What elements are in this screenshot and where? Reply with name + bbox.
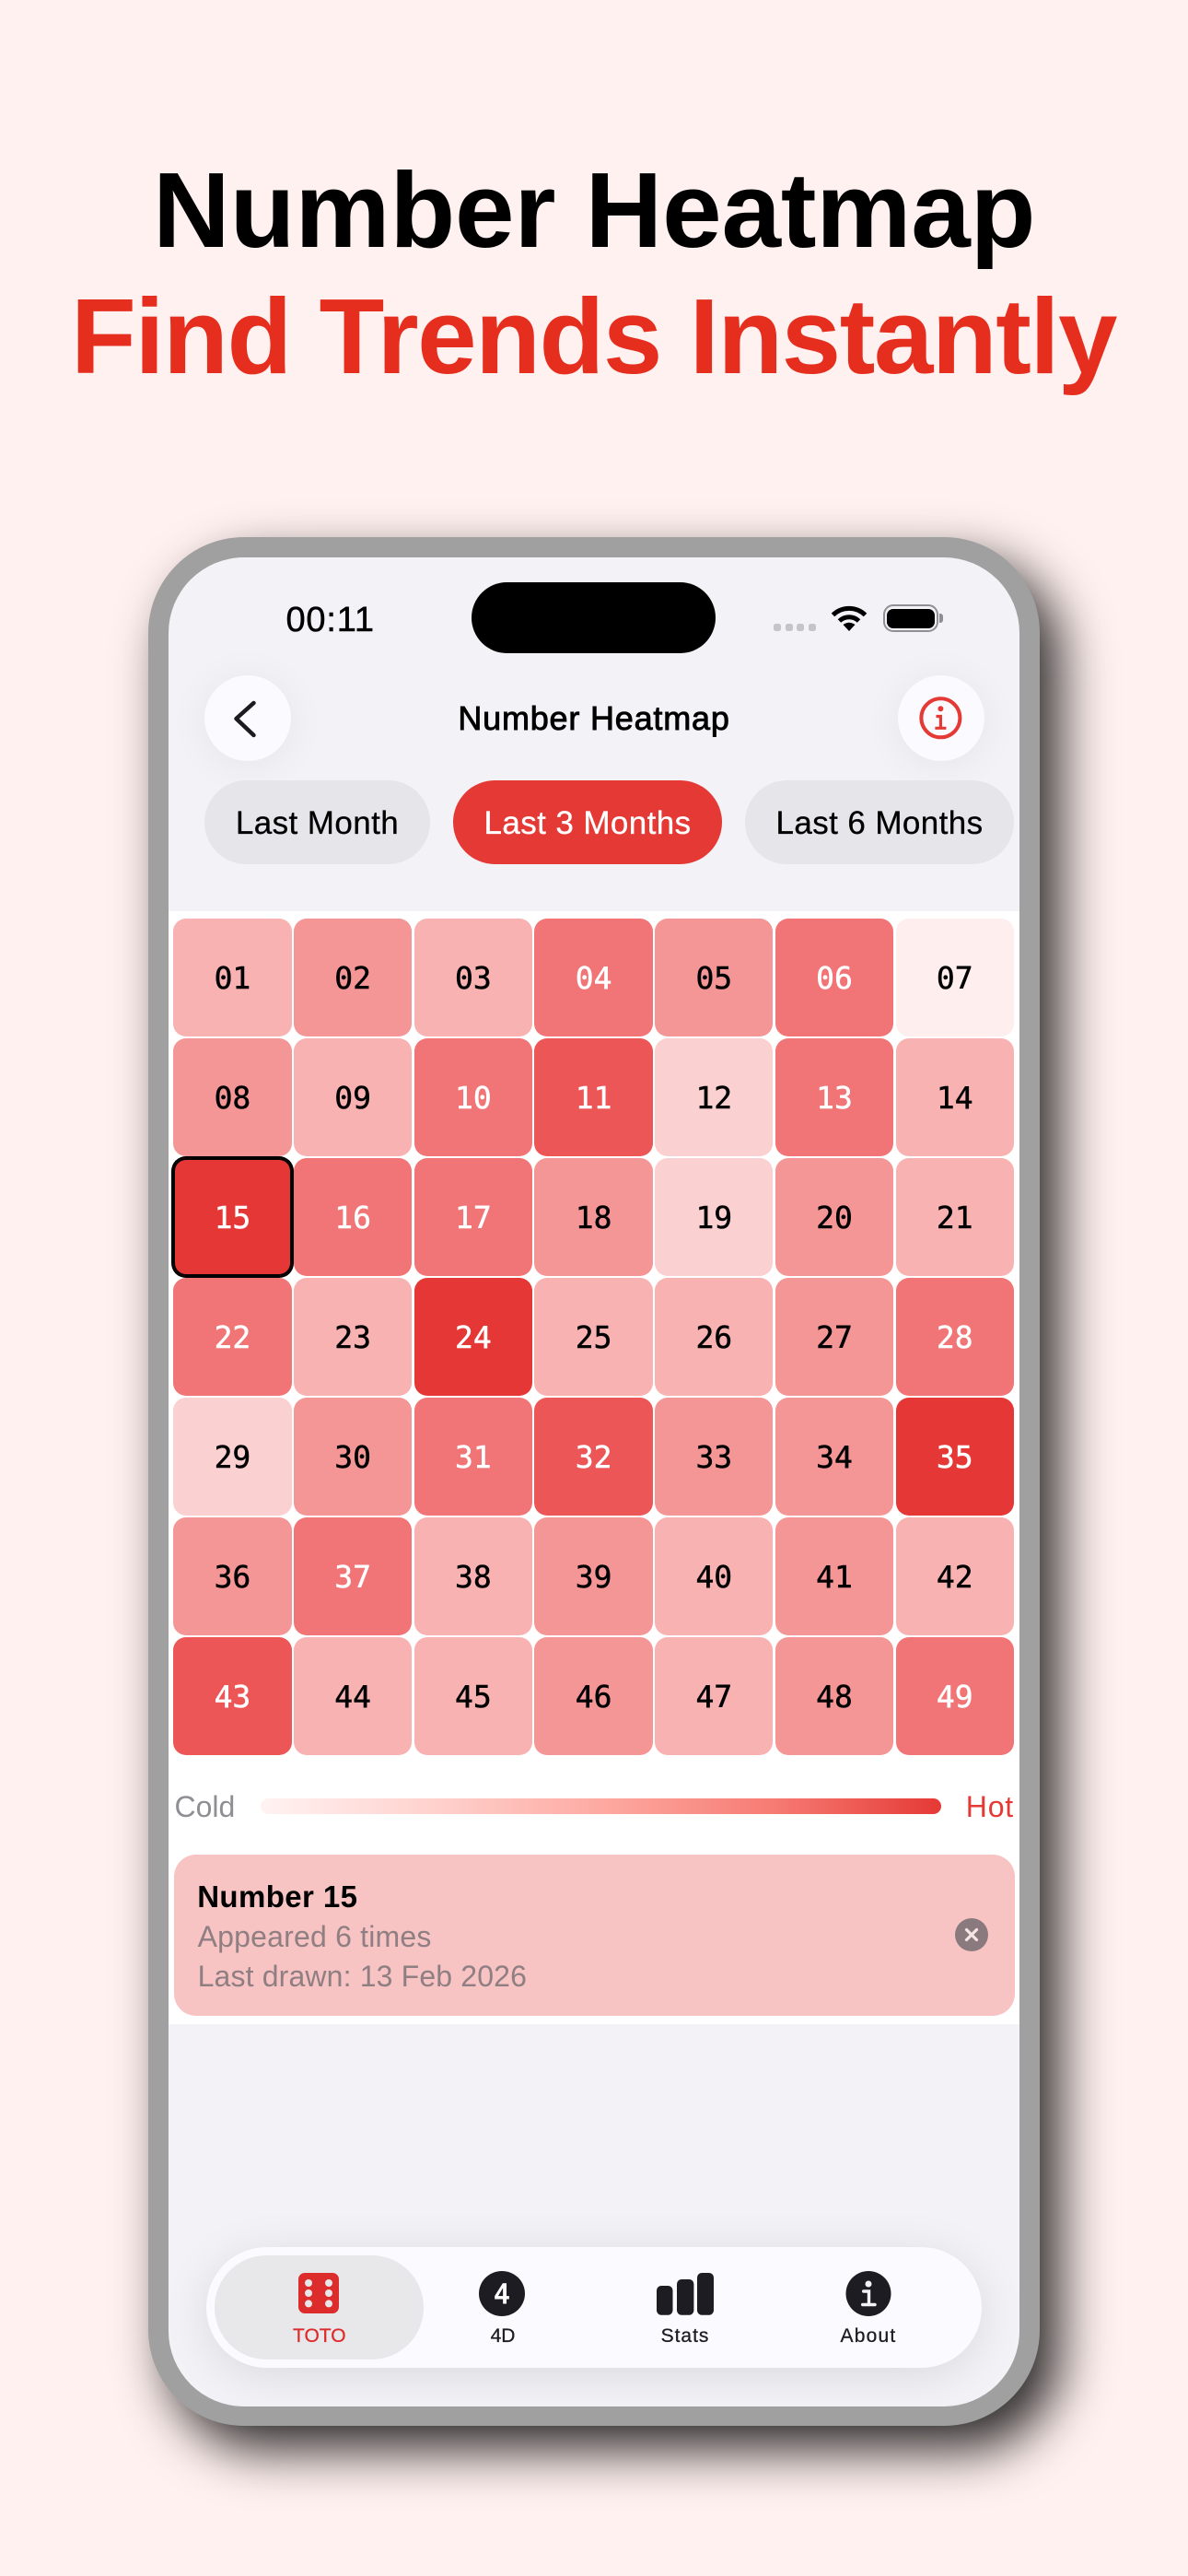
cell 32: 32 (576, 1439, 611, 1475)
cell 06: 06 (816, 960, 853, 996)
cell 18: 18 (576, 1200, 611, 1235)
cell 41 (775, 1517, 893, 1635)
phone screen (169, 557, 1019, 2406)
cell 39 (534, 1517, 653, 1635)
cell 47 (655, 1637, 773, 1755)
cell 46 (534, 1637, 653, 1755)
cell 41: 41 (816, 1559, 853, 1595)
legend: hot label: Hot (966, 1790, 1014, 1823)
cell 23 (294, 1278, 412, 1396)
cell 39: 39 (576, 1559, 611, 1595)
cell 25 (534, 1278, 653, 1396)
cell 33 (655, 1398, 773, 1516)
cell 14 (896, 1038, 1014, 1156)
cell 07: 07 (937, 960, 973, 996)
cell 11: 11 (576, 1080, 611, 1116)
cell 02: 02 (334, 960, 371, 996)
cell 06 (775, 919, 893, 1036)
cell 01: 01 (215, 960, 250, 996)
cell 14: 14 (937, 1080, 973, 1116)
cell 01 (173, 919, 292, 1036)
cell 37: 37 (334, 1559, 371, 1595)
cell 36: 36 (215, 1559, 250, 1595)
screen heading: Number Heatmap (458, 698, 730, 737)
cell 34 (775, 1398, 893, 1516)
cell 17: 17 (455, 1200, 492, 1235)
filter: Last 3 Months (active): Last 3 Months (483, 805, 692, 841)
cell 45 (414, 1637, 532, 1755)
cell 45: 45 (455, 1679, 492, 1715)
cell 27: 27 (816, 1319, 853, 1355)
cell 13 (775, 1038, 893, 1156)
cell 47: 47 (695, 1679, 732, 1715)
tab label: TOTO: TOTO (293, 2325, 346, 2346)
cell 20: 20 (816, 1200, 853, 1235)
cell 23: 23 (334, 1319, 371, 1355)
filter: Last Month (204, 780, 430, 864)
cell 38 (414, 1517, 532, 1635)
cell 12: 12 (695, 1080, 732, 1116)
cell 35: 35 (937, 1439, 973, 1475)
icon: wifi (831, 606, 868, 631)
panel: heatmap content (169, 911, 1019, 2024)
cell 19: 19 (695, 1200, 732, 1235)
tab label: 4D: 4D (491, 2325, 515, 2346)
cell 16: 16 (334, 1200, 371, 1235)
cell 49 (896, 1637, 1014, 1755)
cell 25: 25 (576, 1319, 611, 1355)
cell 22: 22 (215, 1319, 250, 1355)
icon: close (955, 1918, 988, 1951)
icon: about info (845, 2271, 891, 2316)
signal dots (774, 624, 816, 631)
cell 24: 24 (455, 1319, 492, 1355)
cell 21 (896, 1158, 1014, 1276)
cell 13: 13 (816, 1080, 853, 1116)
back button (204, 675, 291, 761)
cell 40 (655, 1517, 773, 1635)
cell 33: 33 (695, 1439, 732, 1475)
legend: cold label: Cold (175, 1790, 235, 1823)
cell 22 (173, 1278, 292, 1396)
tab label: About: About (841, 2325, 896, 2346)
cell 26: 26 (695, 1319, 732, 1355)
legend: gradient bar (261, 1798, 941, 1814)
cell 11 (534, 1038, 653, 1156)
cell 04: 04 (576, 960, 611, 996)
cell 30 (294, 1398, 412, 1516)
filter: Last 6 Months (745, 780, 1014, 864)
cell 27 (775, 1278, 893, 1396)
filter: Last Month: Last Month (236, 805, 399, 841)
cell 49: 49 (937, 1679, 973, 1715)
cell 03 (414, 919, 532, 1036)
cell 43 (173, 1637, 292, 1755)
icon: info outline (919, 697, 961, 739)
cell 19 (655, 1158, 773, 1276)
filter: Last 3 Months (active) (453, 780, 722, 864)
title: Number Heatmap: Number Heatmap (153, 150, 1035, 270)
cell 38: 38 (455, 1559, 492, 1595)
cell 18 (534, 1158, 653, 1276)
cell 20 (775, 1158, 893, 1276)
cell 44: 44 (334, 1679, 371, 1715)
active tab highlight (215, 2255, 424, 2359)
number detail card (174, 1855, 1015, 2016)
cell 42 (896, 1517, 1014, 1635)
card line: last drawn: Last drawn: 13 Feb 2026 (198, 1959, 527, 1992)
cell 37 (294, 1517, 412, 1635)
cell 35 (896, 1398, 1014, 1516)
status time: 00:11 (285, 601, 375, 639)
cell 32 (534, 1398, 653, 1516)
cell 15 selected (173, 1158, 292, 1276)
cell 12 (655, 1038, 773, 1156)
icon: battery (883, 604, 943, 632)
cell 09 (294, 1038, 412, 1156)
cell 05 (655, 919, 773, 1036)
cell 08 (173, 1038, 292, 1156)
cell 03: 03 (455, 960, 492, 996)
cell 48 (775, 1637, 893, 1755)
cell 05: 05 (695, 960, 732, 996)
cell 21: 21 (937, 1200, 973, 1235)
cell 24 (414, 1278, 532, 1396)
dynamic island (472, 582, 716, 653)
phone frame (148, 537, 1040, 2426)
cell 28: 28 (937, 1319, 973, 1355)
cell 43: 43 (215, 1679, 250, 1715)
cell 17 (414, 1158, 532, 1276)
filter: Last 6 Months: Last 6 Months (775, 805, 984, 841)
card line: appearances: Appeared 6 times (198, 1920, 432, 1953)
card title: Number 15 (197, 1879, 357, 1914)
cell 44 (294, 1637, 412, 1755)
cell 34: 34 (816, 1439, 853, 1475)
cell 04 (534, 919, 653, 1036)
cell 36 (173, 1517, 292, 1635)
cell 26 (655, 1278, 773, 1396)
icon: 4D badge: 4 (494, 2277, 510, 2309)
icon: stats bars (657, 2273, 714, 2315)
cell 46: 46 (576, 1679, 611, 1715)
icon: dice (298, 2273, 339, 2313)
cell 10: 10 (455, 1080, 492, 1116)
cell 31: 31 (455, 1439, 492, 1475)
cell 16 (294, 1158, 412, 1276)
cell 48: 48 (816, 1679, 853, 1715)
heatmap grid (171, 919, 1014, 1755)
cell 02 (294, 919, 412, 1036)
info button (898, 675, 984, 761)
cell 30: 30 (334, 1439, 371, 1475)
icon: 4D badge (479, 2271, 525, 2316)
cell 29: 29 (215, 1439, 250, 1475)
bottom tab bar (206, 2247, 982, 2368)
title: Find Trends Instantly: Find Trends Instantly (71, 276, 1116, 396)
tab label: Stats: Stats (661, 2325, 709, 2346)
cell 07 (896, 919, 1014, 1036)
cell 08: 08 (215, 1080, 250, 1116)
cell 28 (896, 1278, 1014, 1396)
icon: chevron left (234, 700, 256, 737)
cell 40: 40 (695, 1559, 732, 1595)
cell 31 (414, 1398, 532, 1516)
cell 29 (173, 1398, 292, 1516)
cell 15 selected: 15 (215, 1200, 250, 1235)
cell 42: 42 (937, 1559, 973, 1595)
cell 09: 09 (334, 1080, 371, 1116)
cell 10 (414, 1038, 532, 1156)
